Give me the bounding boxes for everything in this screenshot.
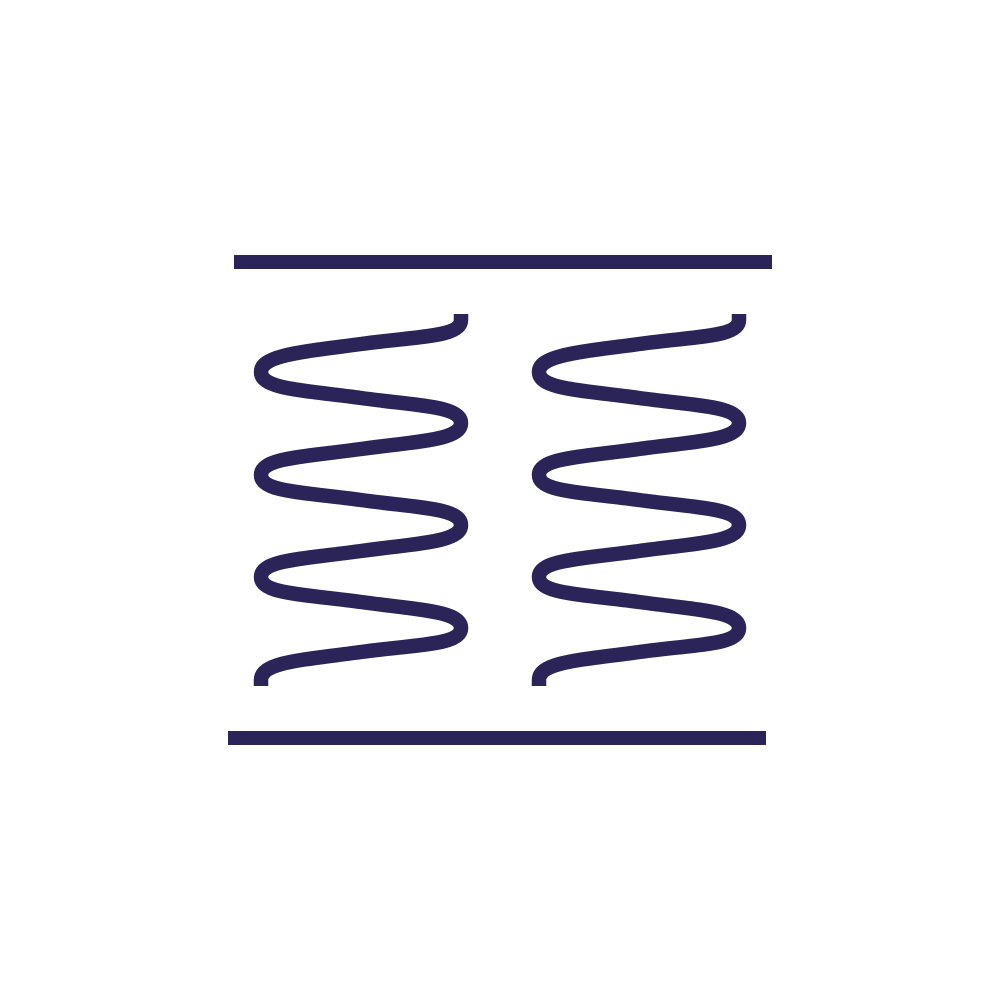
top bar <box>234 255 772 269</box>
right spring <box>539 314 739 686</box>
bottom bar <box>228 731 766 745</box>
left spring <box>261 314 461 686</box>
